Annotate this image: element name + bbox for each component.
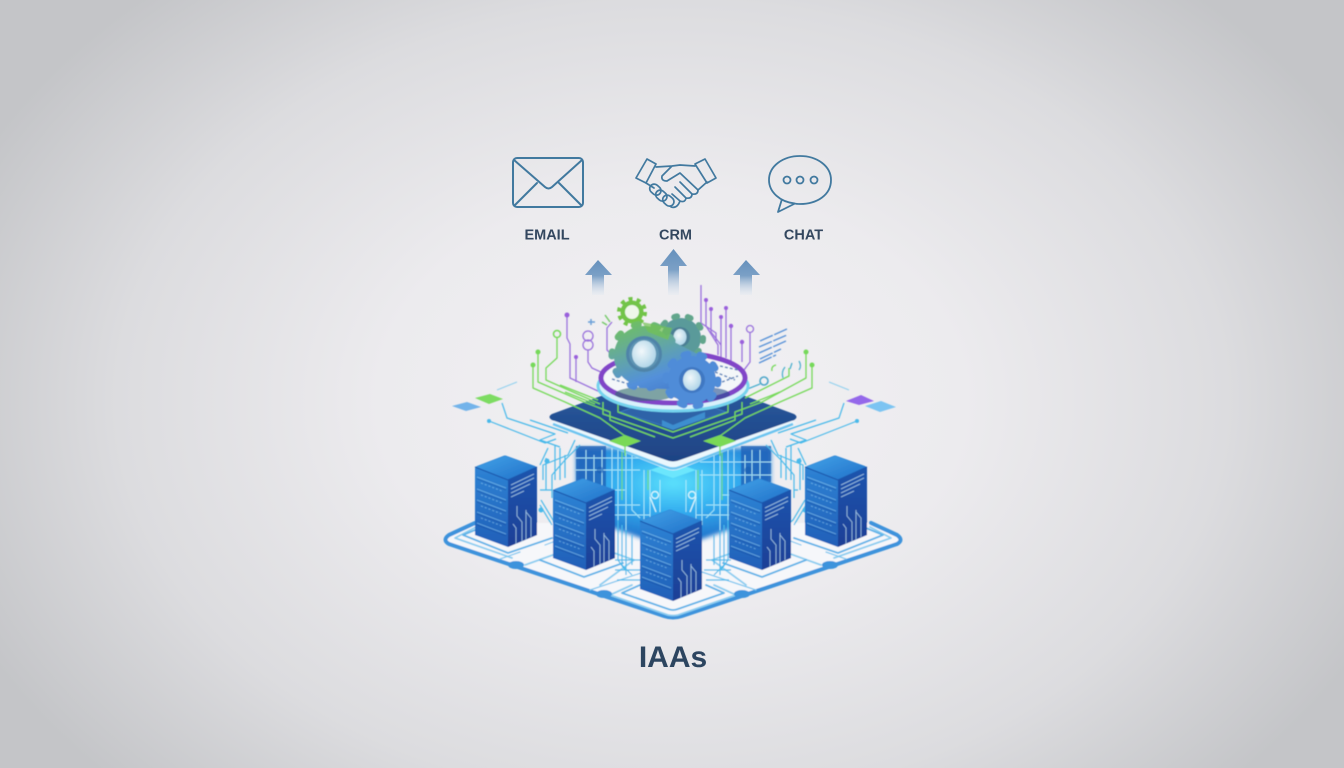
floating tile: light blue right — [865, 401, 896, 412]
gear: large centre — [612, 324, 705, 390]
server 1 — [475, 456, 537, 547]
back server cluster with cyan glow — [576, 445, 772, 540]
server 3 — [640, 510, 702, 601]
label: EMAIL: EMAIL — [524, 228, 570, 244]
gear: small green — [619, 299, 645, 325]
arrow: left up — [585, 260, 612, 295]
arrow: middle up — [660, 249, 687, 295]
chip rim — [549, 378, 797, 470]
purple circuit traces — [567, 285, 750, 392]
ring base platter — [598, 353, 748, 411]
isometric illustration — [446, 285, 900, 618]
floating tile: green left — [475, 394, 503, 404]
small glyphs — [588, 315, 610, 325]
gear: upper right — [659, 316, 703, 360]
gear: lower right — [666, 354, 718, 406]
purple trace end nodes — [564, 298, 744, 359]
chip block front highlight — [662, 412, 705, 430]
green highlights on gears — [642, 322, 672, 340]
server 4 — [729, 478, 791, 570]
chip top plate — [550, 370, 796, 462]
connector nodes on base — [508, 561, 838, 598]
floating tile: blue left — [452, 402, 481, 411]
icon: chat bubble — [769, 156, 831, 212]
label: CRM: CRM — [659, 228, 692, 244]
icon: handshake — [636, 159, 716, 208]
cyan traces between servers — [489, 403, 857, 580]
code lines decoration — [759, 329, 787, 363]
server 2 — [553, 478, 615, 570]
label: CHAT: CHAT — [784, 228, 823, 244]
title: IAAs — [639, 641, 707, 674]
arrow: right up — [733, 260, 760, 295]
icon: email envelope — [513, 158, 583, 207]
green trace end nodes — [530, 350, 814, 368]
decorative dashes near tiles — [497, 382, 849, 390]
green circuit traces — [533, 338, 812, 456]
base platform — [446, 523, 900, 618]
chip centre block — [620, 393, 726, 429]
server 5 — [805, 456, 867, 547]
green chip pads — [609, 435, 736, 447]
code bracket glyphs — [730, 361, 800, 396]
floating tile: purple right — [846, 395, 874, 405]
